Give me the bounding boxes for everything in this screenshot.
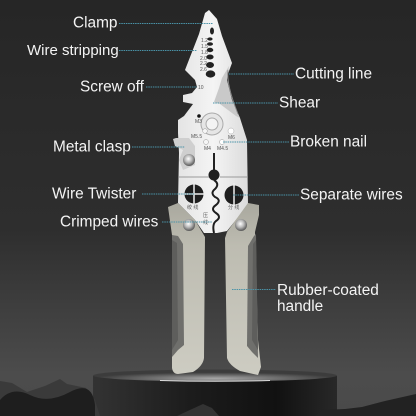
right handle (225, 203, 261, 375)
label: Rubber-coated handle: Rubber-coated (277, 282, 379, 299)
gauge numbers (198, 38, 208, 91)
label: Clamp: Clamp (73, 14, 117, 32)
separate wires hole: 分 线 (228, 204, 239, 211)
label: Wire stripping: Wire stripping (27, 42, 119, 59)
shear blade (214, 66, 240, 118)
label: Broken nail: Broken nail (290, 134, 367, 150)
pivot and small holes: M4 (204, 146, 211, 152)
plier head and jaw: 线 (203, 219, 208, 226)
separate wires hole (224, 183, 244, 211)
pivot and small holes (191, 113, 235, 152)
display podium (93, 370, 337, 416)
gauge numbers: 1.5 (201, 44, 208, 50)
dark rocks (0, 379, 416, 416)
gauge numbers: 1.2 (201, 38, 208, 44)
gauge numbers: 10 (198, 85, 204, 91)
wire stripping holes (206, 28, 215, 78)
gauge numbers: 1.8 (201, 50, 208, 56)
gauge numbers: 2.6 (200, 67, 207, 73)
label: Separate wires: Separate wires (300, 186, 403, 204)
plier head and jaw (173, 10, 248, 233)
label: Wire Twister: Wire Twister (52, 186, 136, 202)
gauge numbers: 2.0 (200, 56, 207, 62)
pivot and small holes: M4.5 (217, 146, 228, 152)
crimp teeth (212, 180, 219, 233)
pivot and small holes: M3 (195, 119, 202, 125)
pivot and small holes: M6 (228, 135, 235, 141)
wire twister hole (184, 184, 204, 211)
label: Rubber-coated handle: handle (277, 298, 323, 315)
label: Screw off: Screw off (80, 78, 145, 96)
label: Crimped wires: Crimped wires (60, 214, 159, 230)
label: Metal clasp: Metal clasp (53, 138, 131, 156)
crimp label: 压 (203, 213, 208, 219)
center slit and joint (213, 153, 215, 171)
label: Shear: Shear (279, 94, 320, 112)
label: Cutting line: Cutting line (295, 66, 372, 82)
gauge numbers: 2.2 (200, 61, 207, 67)
leader lines (119, 24, 299, 290)
left handle (168, 203, 205, 374)
metal clasp (173, 138, 195, 170)
wire twister hole: 绞 线 (187, 204, 198, 211)
pivot and small holes: M5.5 (191, 134, 202, 140)
pliers (168, 10, 261, 375)
